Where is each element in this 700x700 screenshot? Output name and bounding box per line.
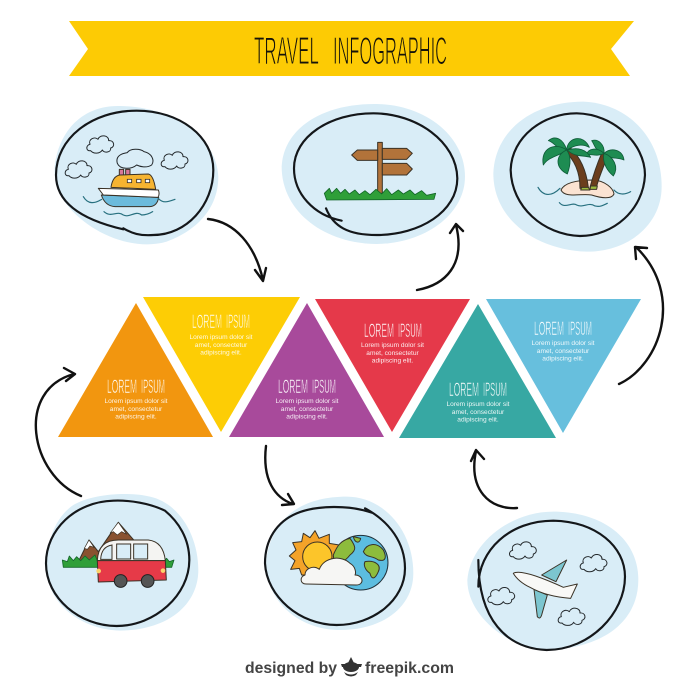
title banner: INFOGRAPHIC — [333, 30, 447, 73]
triangle: red: IPSUM — [398, 320, 422, 342]
title banner — [69, 21, 634, 76]
triangle: orange: Lorem ipsum dolor sit — [104, 398, 168, 405]
triangle: blue: LOREM — [534, 318, 564, 340]
triangle: teal: adipiscing elit. — [457, 416, 499, 424]
panel: airplane circle — [467, 512, 638, 650]
triangle: purple: IPSUM — [312, 376, 336, 398]
title: TRAVEL — [254, 30, 319, 73]
arrow: purple triangle to weather — [265, 446, 294, 505]
triangle: red: amet, consectetur — [366, 350, 420, 357]
triangle: teal: Lorem ipsum dolor sit — [446, 401, 510, 408]
panel: weather and globe circle — [265, 497, 413, 630]
arrow: van to orange triangle — [36, 368, 81, 496]
triangle: blue: Lorem ipsum dolor sit — [531, 340, 595, 347]
footer credit — [245, 657, 454, 677]
triangle: blue — [486, 299, 641, 433]
icon: ship — [65, 136, 188, 216]
triangle: orange: LOREM — [107, 376, 137, 398]
triangle: blue: amet, consectetur — [537, 348, 590, 355]
icon: airplane — [488, 542, 607, 625]
triangle: red: Lorem ipsum dolor sit — [361, 342, 424, 349]
triangle: teal: IPSUM — [483, 379, 507, 401]
icon: sun, cloud and globe — [289, 531, 388, 590]
icon: van and mountains — [62, 522, 174, 587]
triangle: teal: LOREM — [449, 379, 479, 401]
triangle: yellow: amet, consectetur — [195, 342, 248, 349]
triangle: red: adipiscing elit. — [372, 358, 413, 364]
triangle: purple: Lorem ipsum dolor sit — [275, 398, 339, 405]
icon: freepik logo — [341, 657, 362, 676]
triangle: teal: amet, consectetur — [452, 409, 505, 416]
icon: signpost — [324, 142, 436, 200]
triangle: yellow: adipiscing elit. — [200, 350, 242, 356]
triangle: teal — [399, 304, 556, 438]
triangle: blue: IPSUM — [568, 318, 592, 340]
arrow: airplane to teal triangle — [471, 450, 517, 508]
triangle: purple: adipiscing elit. — [286, 414, 328, 420]
triangle: purple — [229, 303, 384, 437]
triangle: blue: adipiscing elit. — [542, 356, 584, 362]
arrow: ship to yellow triangle — [208, 219, 266, 281]
triangle: purple: amet, consectetur — [281, 406, 334, 413]
triangle: yellow — [143, 297, 300, 432]
triangle: red — [315, 299, 470, 432]
panel: signpost circle — [282, 104, 465, 244]
triangle: yellow: Lorem ipsum dolor sit — [189, 334, 253, 341]
panel: ship circle — [55, 106, 218, 244]
footer credit: designed by — [245, 660, 337, 677]
triangle: orange: IPSUM — [141, 376, 165, 398]
triangle: yellow: IPSUM — [226, 311, 250, 333]
triangle: yellow: LOREM — [192, 311, 222, 333]
arrow: red triangle to signpost — [417, 224, 463, 290]
panel: van circle — [46, 494, 198, 631]
triangle: orange — [58, 303, 213, 437]
triangle: orange: adipiscing elit. — [115, 414, 157, 420]
triangle: red: LOREM — [364, 320, 394, 342]
triangle: purple: LOREM — [278, 376, 308, 398]
panel: island circle — [493, 102, 662, 252]
footer credit: freepik.com — [365, 660, 454, 677]
arrow: blue triangle to island — [619, 247, 663, 384]
icon: palm island — [538, 138, 631, 206]
triangle: orange: amet, consectetur — [110, 406, 163, 413]
